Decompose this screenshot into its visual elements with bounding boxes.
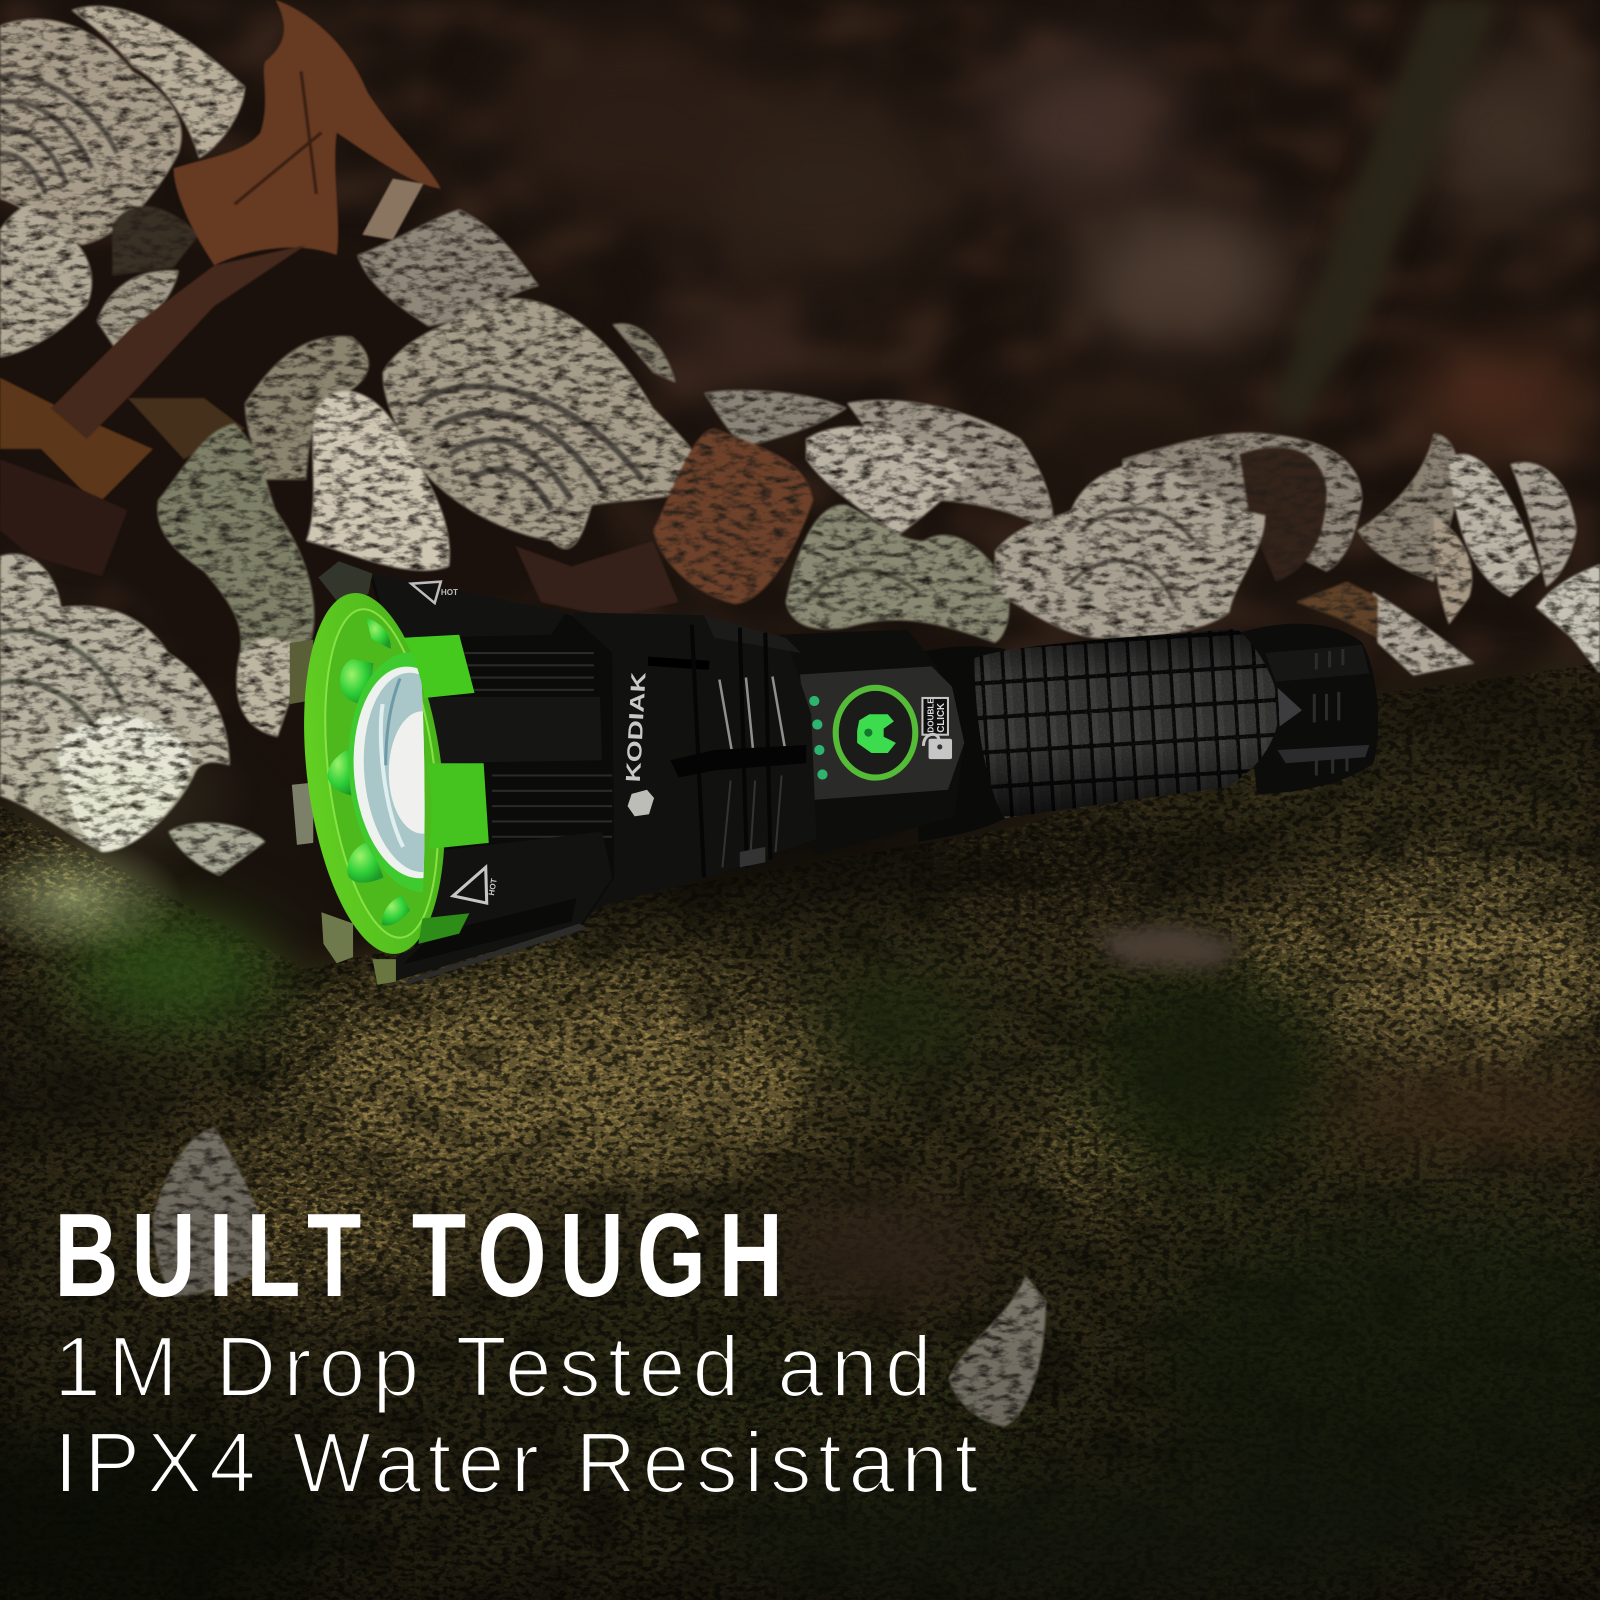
mushrooms: bottom foreground xyxy=(153,1128,1046,1427)
tail arrow xyxy=(1278,688,1302,727)
collar xyxy=(551,612,816,923)
heat warning upper xyxy=(411,582,458,603)
blurred tree trunk xyxy=(1270,0,1500,429)
lens xyxy=(348,652,425,892)
heat warning upper: HOT xyxy=(441,588,458,597)
double click lock label: CLICK xyxy=(936,703,947,733)
head body xyxy=(367,573,614,986)
double click lock label xyxy=(922,698,952,759)
heat warning lower: HOT xyxy=(487,878,499,896)
mossy ground xyxy=(0,612,1600,1600)
heat warning lower xyxy=(453,867,499,903)
battery dots xyxy=(809,696,828,780)
mushrooms: right cluster xyxy=(995,433,1600,676)
switch panel xyxy=(800,666,964,800)
upper prong xyxy=(372,573,566,638)
textured grip xyxy=(974,628,1279,818)
subtitle: 1M Drop Tested and xyxy=(54,1319,931,1414)
subtitle: IPX4 Water Resistant xyxy=(54,1415,978,1510)
brand text: KODIAK xyxy=(623,671,651,783)
head panel xyxy=(420,697,602,763)
mushrooms: top left cluster xyxy=(0,6,245,357)
mushroom: lit left shelf xyxy=(0,554,265,876)
title: BUILT TOUGH xyxy=(54,1190,783,1322)
green crown tabs xyxy=(403,635,489,944)
flashlight xyxy=(286,561,1378,986)
mushrooms: large centre shelf xyxy=(157,209,701,737)
dark leaf litter xyxy=(0,245,679,776)
subtitle xyxy=(54,1319,978,1510)
bark patch xyxy=(1092,923,1245,969)
dry brown leaf xyxy=(51,0,441,439)
light pool on ground xyxy=(0,704,260,959)
tail cap xyxy=(1240,624,1378,794)
switch housing xyxy=(780,630,964,855)
brand bear logo xyxy=(628,790,654,816)
power button xyxy=(836,688,915,778)
lower fins xyxy=(492,776,612,837)
neck xyxy=(918,646,1017,842)
green bezel xyxy=(286,585,463,962)
collar rib highlights xyxy=(719,677,785,750)
bottom dark vignette xyxy=(0,1122,1600,1600)
lower prong xyxy=(386,832,612,982)
side tabs xyxy=(290,561,396,985)
double click lock label: DOUBLE xyxy=(927,698,936,733)
mushrooms: middle cluster xyxy=(653,390,1054,643)
reflector domes xyxy=(327,618,410,926)
upper fins xyxy=(464,653,594,690)
